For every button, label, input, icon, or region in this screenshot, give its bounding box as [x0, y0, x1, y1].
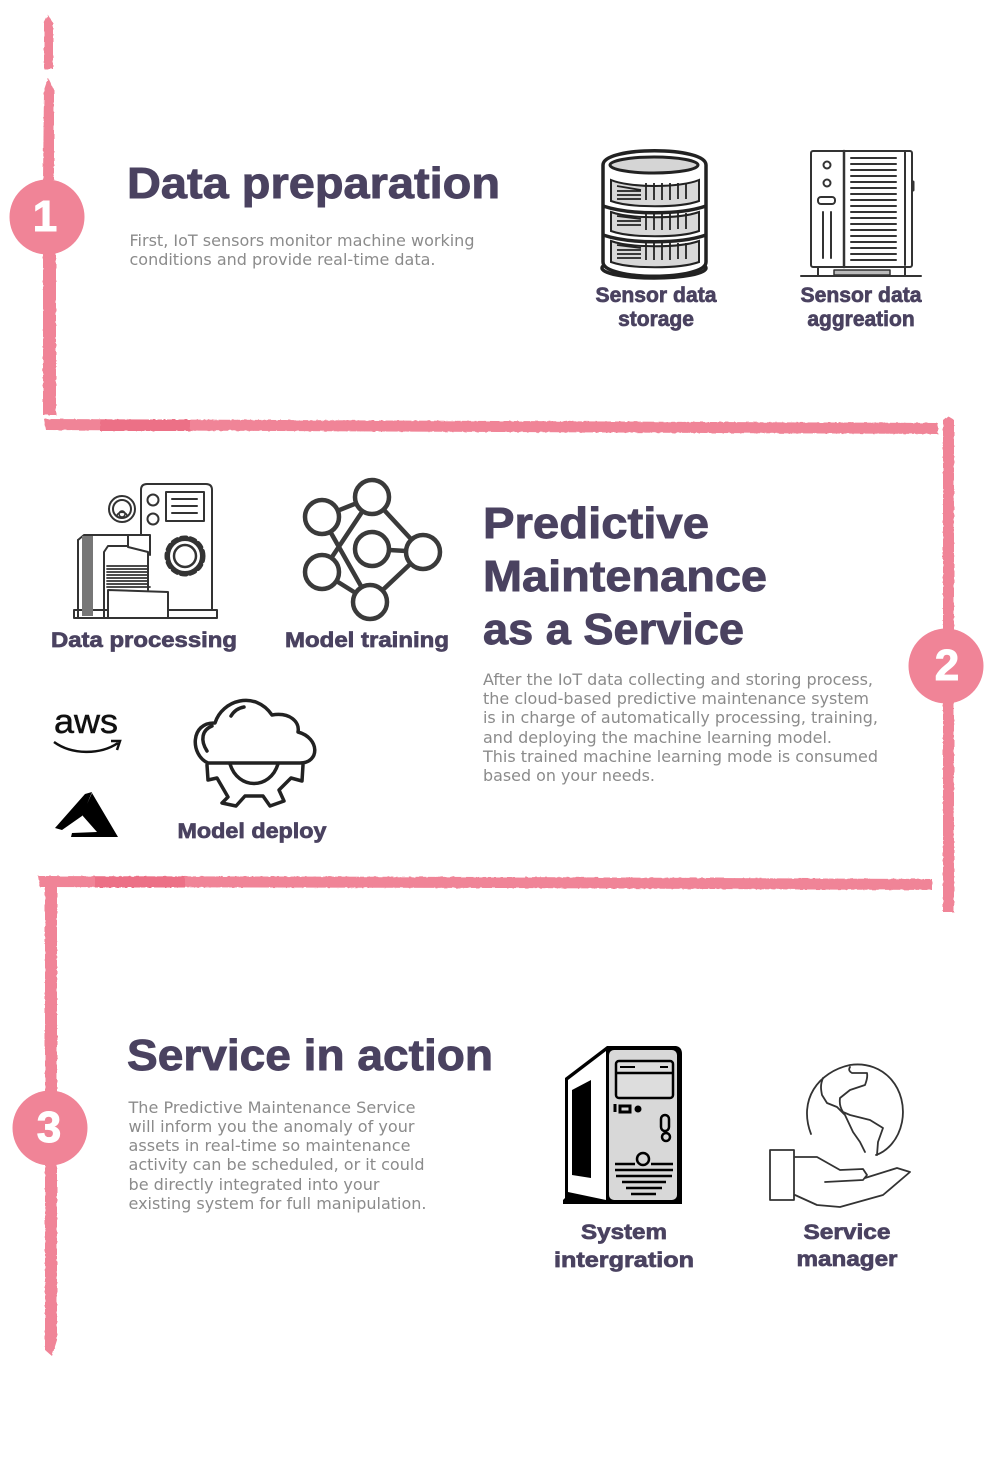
- label: system integration: System: [581, 1221, 667, 1244]
- text block: predictive maintenance: After the IoT data collecting and storing process,: [483, 670, 873, 689]
- heading: predictive maintenance as a service: Maintenance: [483, 552, 767, 601]
- label: model deploy: Model deploy: [178, 820, 327, 843]
- heading: predictive maintenance as a service: Predictive: [483, 499, 709, 548]
- icon: model training: [305, 480, 440, 619]
- panel: service in action: manager: [796, 1248, 898, 1271]
- text block: data preparation: First, IoT sensors monitor machine working: [130, 231, 475, 250]
- heading: predictive maintenance as a service: [483, 499, 767, 654]
- text block: data preparation: [130, 231, 475, 269]
- step 2 badge: [908, 628, 984, 704]
- horizontal connector 1: [44, 419, 938, 434]
- text block: service in action: assets in real-time so maintenance: [128, 1136, 410, 1155]
- timeline path segment 3: [45, 885, 57, 1356]
- icon: sensor data storage: [602, 151, 706, 278]
- text block: data preparation: conditions and provide real-time data.: [130, 250, 436, 269]
- panel: data preparation: aggreation: [807, 308, 915, 331]
- text block: predictive maintenance: is in charge of automatically processing, training,: [483, 708, 878, 727]
- label: sensor data aggregation: Sensor data: [800, 284, 922, 307]
- text block: service in action: activity can be scheduled, or it could: [128, 1155, 424, 1174]
- heading: service in action: Service in action: [127, 1031, 493, 1080]
- icon: sensor data aggregation: [801, 151, 921, 276]
- step 3 badge: [12, 1090, 88, 1166]
- horizontal connector 2: [38, 876, 932, 890]
- label: sensor data storage: Sensor data: [596, 284, 717, 307]
- step 1 badge: [10, 180, 84, 254]
- panel: service in action: [127, 1031, 910, 1272]
- icon: data processing: [74, 484, 217, 618]
- icon: aws logo: aws: [54, 703, 118, 741]
- timeline path segment 1: [43, 15, 56, 415]
- text block: predictive maintenance: This trained machine learning mode is consumed: [482, 747, 878, 766]
- text block: predictive maintenance: the cloud-based predictive maintenance system: [483, 689, 869, 708]
- icon: azure logo: [55, 792, 118, 837]
- heading: predictive maintenance as a service: as a Service: [483, 605, 744, 654]
- text block: service in action: be directly integrated into your: [128, 1175, 380, 1194]
- text block: service in action: The Predictive Maintenance Service: [127, 1098, 416, 1117]
- label: data processing: Data processing: [51, 629, 237, 652]
- text block: service in action: will inform you the anomaly of your: [128, 1117, 415, 1136]
- heading: data preparation: Data preparation: [127, 159, 500, 208]
- label: model training: Model training: [285, 629, 449, 652]
- panel: data preparation: [127, 151, 922, 331]
- panel: predictive maintenance as a service: [51, 480, 878, 843]
- text block: predictive maintenance: and deploying the machine learning model.: [483, 728, 832, 747]
- step 3 badge: 3: [37, 1103, 61, 1152]
- text block: service in action: [127, 1098, 427, 1213]
- icon: service manager: [770, 1064, 910, 1207]
- text block: predictive maintenance: [482, 670, 878, 785]
- icon: model deploy: [195, 700, 315, 806]
- panel: service in action: intergration: [554, 1249, 694, 1272]
- panel: data preparation: storage: [618, 308, 694, 331]
- text block: predictive maintenance: based on your needs.: [483, 766, 655, 785]
- text block: service in action: existing system for full manipulation.: [128, 1194, 426, 1213]
- timeline path segment 2: [943, 416, 954, 912]
- icon: system integration: [563, 1046, 682, 1204]
- step 2 badge: 2: [935, 641, 959, 690]
- step 1 badge: 1: [33, 192, 57, 241]
- label: service manager: Service: [804, 1221, 890, 1244]
